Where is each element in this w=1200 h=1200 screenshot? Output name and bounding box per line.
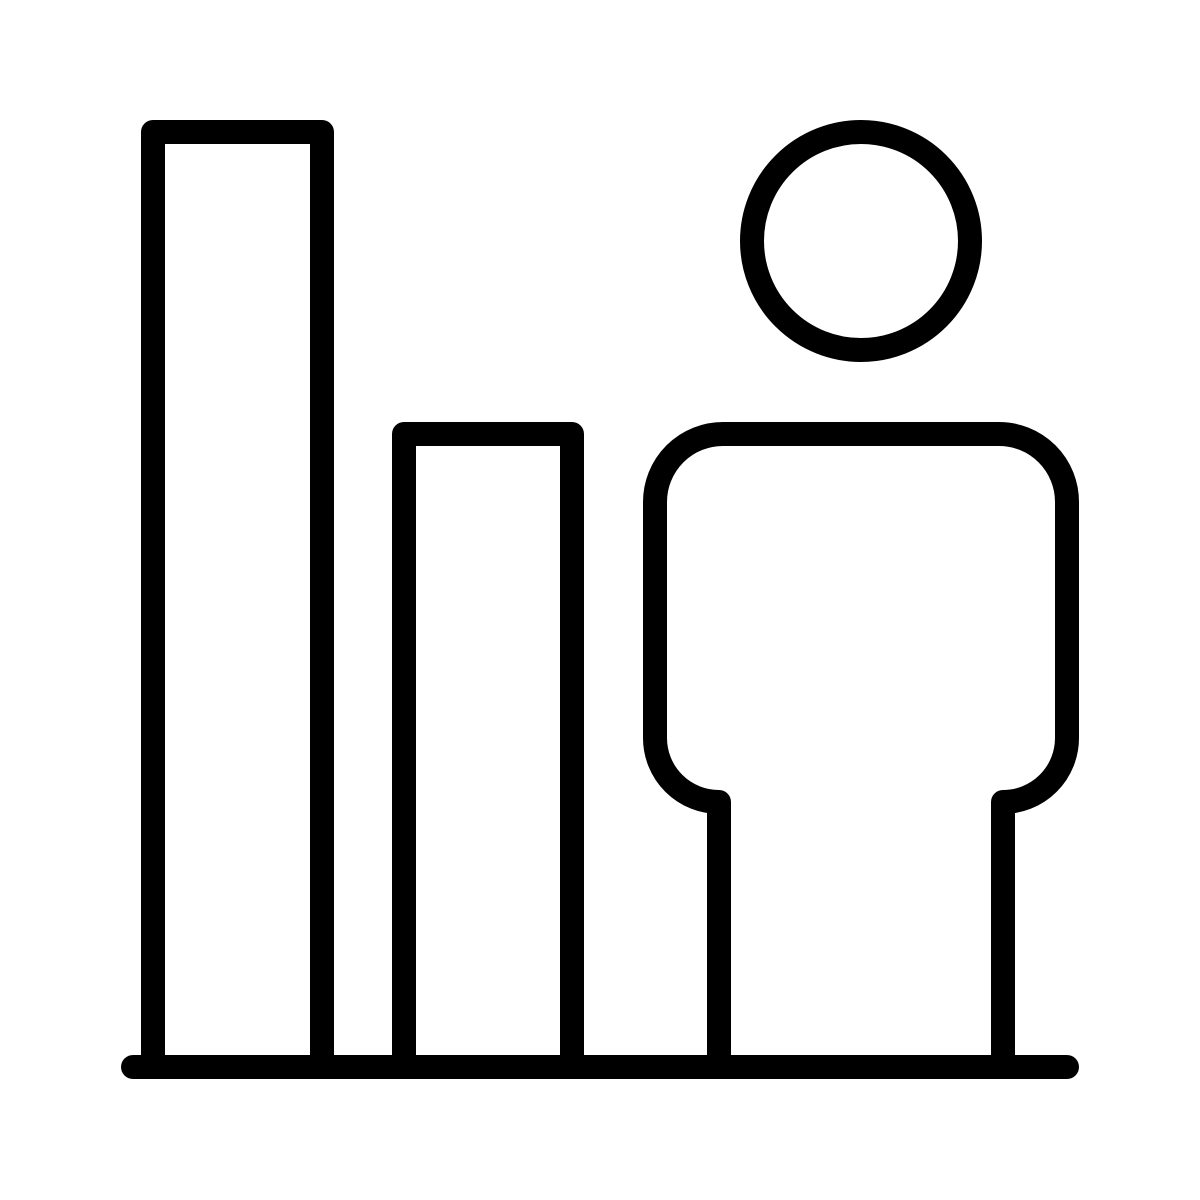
tall bar	[153, 132, 322, 1067]
person head	[752, 132, 970, 350]
short bar	[404, 434, 572, 1067]
baseline	[133, 1055, 1067, 1079]
person body	[655, 434, 1067, 1067]
